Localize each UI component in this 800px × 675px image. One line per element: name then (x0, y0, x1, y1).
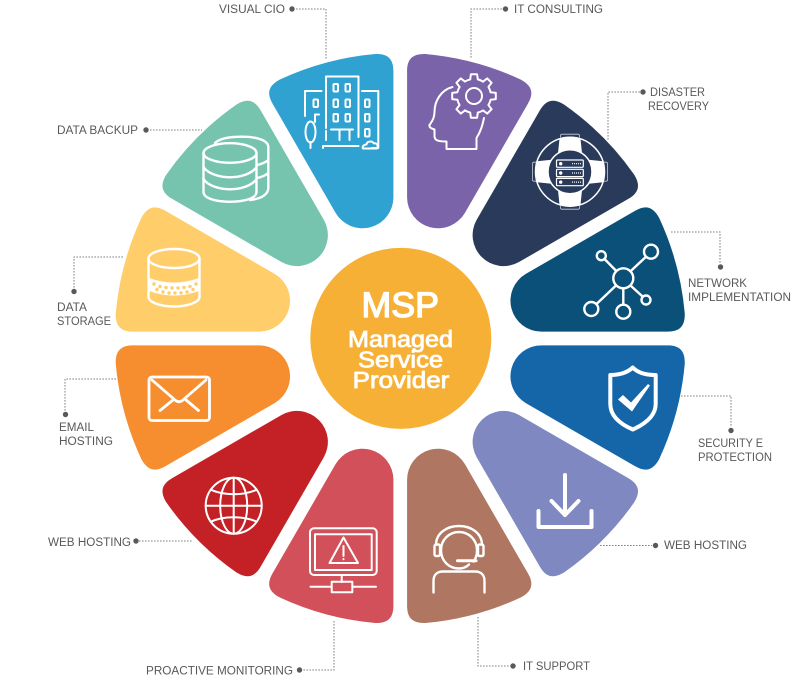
label: web hosting: WEB HOSTING (48, 535, 131, 549)
subtitle: Managed Service Provider (348, 326, 453, 393)
panel: IT support (369, 433, 590, 673)
label: data storage (57, 257, 123, 328)
label: data storage: DATA (57, 300, 88, 314)
label: IT support (478, 617, 590, 673)
label: email hosting: HOSTING (59, 434, 113, 448)
icon: head with gear (429, 74, 496, 149)
label: email hosting (59, 379, 116, 448)
petal (495, 307, 693, 474)
icon: headset agent (434, 526, 484, 592)
label: security protection: SECURITY E (698, 436, 763, 450)
icon: network nodes (584, 245, 658, 319)
label: web hosting (600, 538, 747, 552)
label: IT consulting (471, 2, 603, 59)
label: security protection (681, 396, 772, 464)
label: web hosting: WEB HOSTING (664, 538, 747, 552)
subtitle: Managed Service Provider: Managed (348, 326, 453, 352)
petal (369, 433, 536, 631)
petal (495, 203, 693, 370)
label: data backup: DATA BACKUP (57, 123, 138, 137)
icon: monitor with alert (310, 528, 377, 592)
petal (437, 375, 647, 585)
label: disaster recovery: RECOVERY (648, 99, 709, 113)
petal (437, 92, 647, 302)
label: IT consulting: IT CONSULTING (514, 2, 603, 16)
icon: database stack (204, 137, 268, 202)
label: data backup (57, 123, 202, 137)
icon: database with band (148, 249, 200, 306)
petal (265, 433, 432, 631)
label: disaster recovery: DISASTER (650, 85, 705, 99)
petal (153, 375, 364, 585)
label: visual CIO (219, 2, 326, 59)
panel: proactive monitoring (146, 433, 432, 675)
panel: data backup (57, 92, 364, 302)
petal (153, 92, 364, 302)
panel: data storage (57, 203, 305, 370)
label: security protection: PROTECTION (698, 450, 772, 464)
icon: office buildings (305, 76, 378, 148)
subtitle: Managed Service Provider: Provider (353, 367, 450, 393)
label: web hosting (48, 535, 192, 549)
petal (265, 46, 432, 244)
panel: email hosting (59, 307, 305, 474)
label: proactive monitoring (146, 621, 334, 675)
panel: security protection (495, 307, 772, 474)
center disc (310, 248, 491, 429)
label: disaster recovery (608, 85, 709, 141)
label: network implementation: IMPLEMENTATION (688, 290, 791, 304)
panel: center MSP circle (310, 248, 491, 429)
icon: lifebuoy with server (532, 134, 608, 209)
label: visual CIO: VISUAL CIO (219, 2, 285, 16)
petal (108, 307, 305, 474)
panel: web hosting download (437, 375, 747, 585)
panel: IT consulting (369, 2, 603, 244)
label: data storage: STORAGE (57, 314, 111, 328)
petal (369, 46, 536, 244)
panel: network implementation (495, 203, 791, 370)
panel: visual CIO (219, 2, 432, 244)
icon: globe (206, 478, 262, 534)
panel: disaster recovery (437, 85, 709, 302)
label: email hosting: EMAIL (59, 420, 94, 434)
panel: web hosting globe (48, 375, 364, 585)
icon: envelope (149, 377, 210, 420)
label: IT support: IT SUPPORT (523, 659, 590, 673)
petal (108, 203, 305, 370)
label: network implementation (671, 232, 791, 304)
icon: shield with check (610, 368, 656, 430)
subtitle: Managed Service Provider: Service (358, 346, 443, 372)
label: network implementation: NETWORK (688, 276, 748, 290)
title: MSP: MSP (362, 286, 439, 325)
icon: download tray (538, 475, 592, 527)
